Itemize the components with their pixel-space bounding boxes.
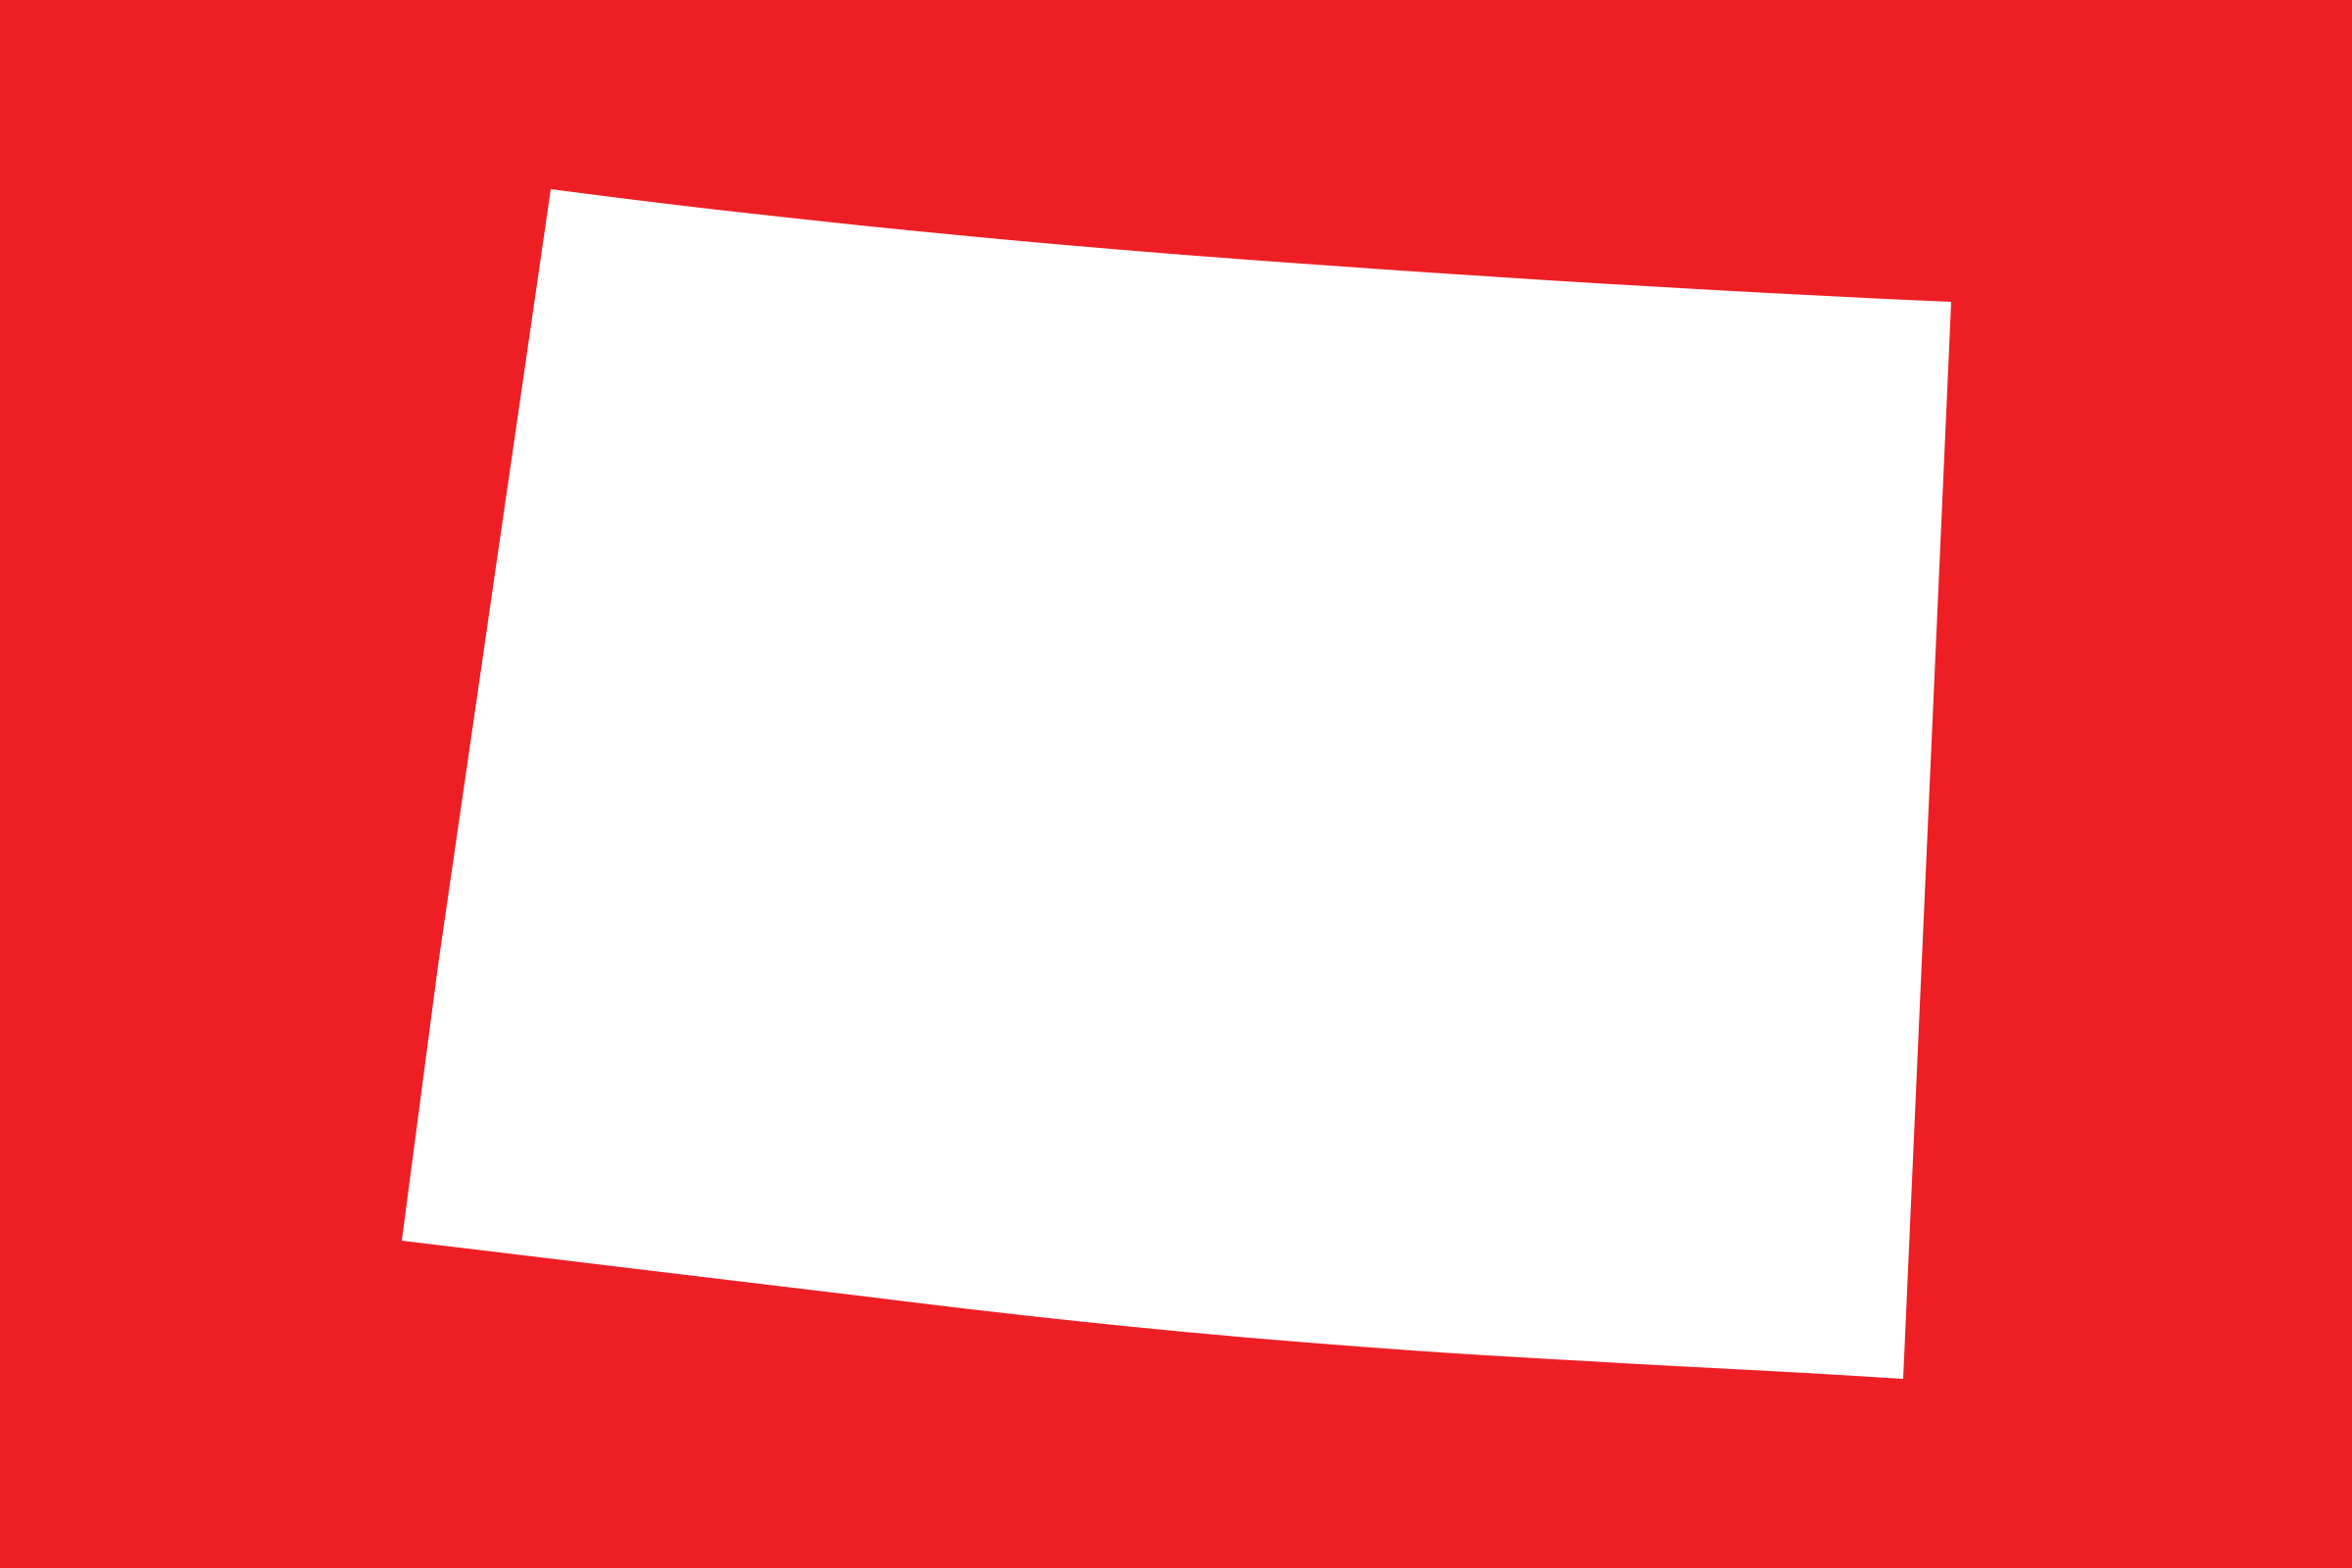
white quadrilateral shape [402,189,1951,1379]
